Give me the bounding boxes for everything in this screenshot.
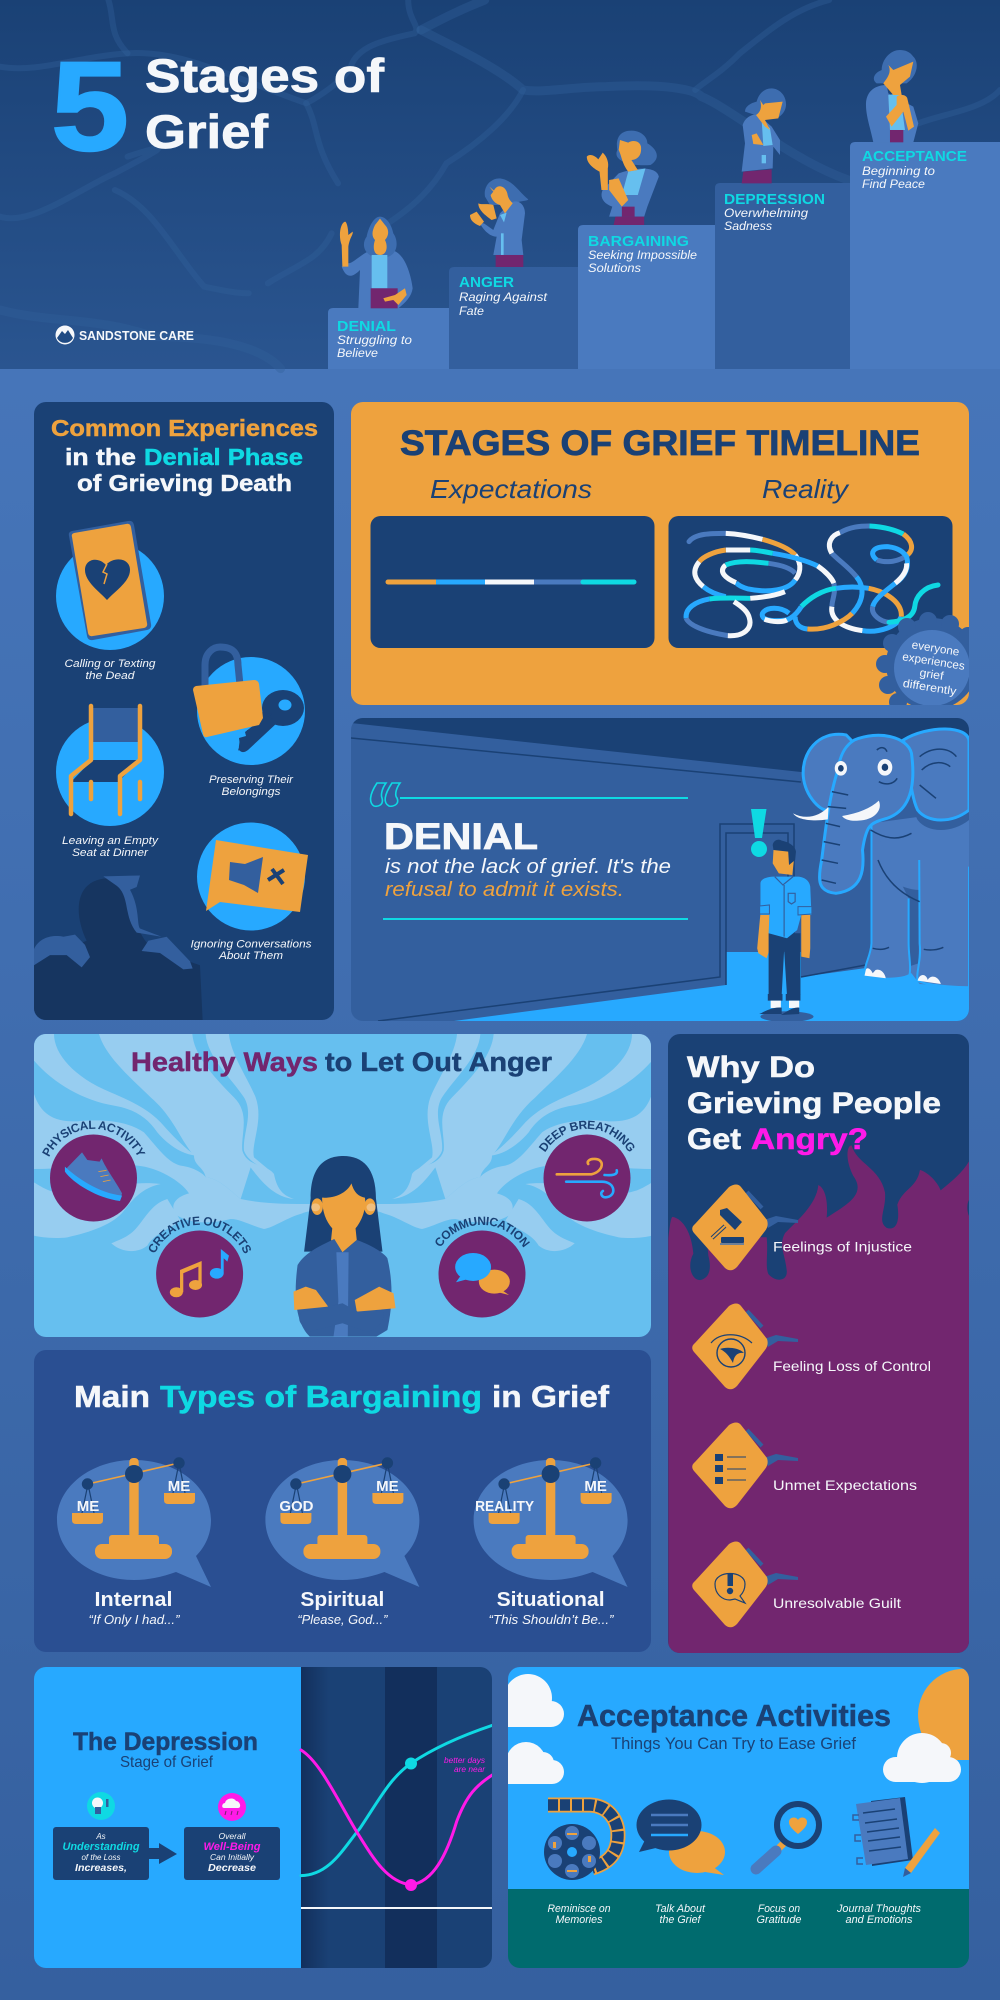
- step label: acceptance: [862, 148, 967, 191]
- illustration: man looking away: [757, 840, 814, 1022]
- step label: acceptance: Beginning to: [862, 166, 936, 178]
- left panel background: [34, 1667, 301, 1968]
- captions: the Grief: [660, 1914, 701, 1926]
- step label: depression: Sadness: [724, 221, 772, 233]
- panel background: [668, 1034, 969, 1653]
- step label: denial: DENIAL: [337, 318, 396, 335]
- flames: [668, 1145, 970, 1654]
- ceiling: [353, 718, 969, 772]
- steam swirls right: [374, 1034, 652, 1251]
- box: well-being decreases: Well-Being: [204, 1841, 261, 1853]
- room background: [351, 723, 916, 1021]
- sun: [918, 1669, 969, 1760]
- captions: and Emotions: [846, 1914, 913, 1926]
- panel: denial quote with elephant in the room: [351, 718, 969, 1022]
- quote body line one: is not the lack of grief. It's the: [385, 856, 671, 878]
- can: feeling loss of control: Feeling Loss of Control: [773, 1358, 931, 1374]
- captions: Reminisce on: [548, 1903, 610, 1915]
- badge: everyone experiences grief differently: differently: [902, 678, 957, 698]
- captions: Gratitude: [756, 1914, 802, 1926]
- crack texture: [0, 0, 1000, 369]
- panel: why do grieving people get angry: [668, 1034, 970, 1654]
- clouds: [504, 1674, 961, 1784]
- step label: denial: [337, 318, 413, 360]
- activity: creative outlets: [148, 1216, 251, 1318]
- step label: anger: [459, 274, 548, 318]
- step label: depression: [724, 191, 825, 233]
- quote heading: DENIAL: [384, 816, 538, 857]
- activity: physical activity: [42, 1120, 146, 1222]
- panel: common experiences in the denial phase: [34, 402, 334, 1020]
- icon: notebook and pencil: [853, 1797, 940, 1877]
- steam swirls left: [34, 1034, 312, 1251]
- caption: Seat at Dinner: [72, 847, 149, 859]
- icon: speech bubble with exclamation: [715, 1573, 745, 1603]
- title number 5: 5: [51, 35, 129, 177]
- caption: [209, 774, 294, 798]
- heading: [132, 1051, 552, 1077]
- exclamation mark: [751, 809, 767, 857]
- heading: [51, 415, 318, 496]
- captions: Talk About: [655, 1903, 706, 1915]
- scale: situational: [474, 1457, 628, 1587]
- title: Stages of: Stages of: [145, 49, 384, 102]
- heading: to Let Out Anger: [325, 1047, 553, 1077]
- activity: communication: [436, 1216, 530, 1318]
- heading: The Depression: [73, 1728, 258, 1756]
- activity: physical activity: PHYSICAL ACTIVITY: [42, 1120, 146, 1157]
- heading: Acceptance Activities: [577, 1698, 891, 1733]
- heading: in the: [65, 444, 136, 470]
- scale: internal: [57, 1457, 211, 1587]
- caption: Preserving Their: [209, 774, 294, 786]
- icon: gavel: [712, 1208, 744, 1245]
- step label: anger: Raging Against: [459, 292, 548, 304]
- heading: in Grief: [492, 1379, 610, 1414]
- scale caption: spiritual: [297, 1589, 388, 1627]
- quote marks: [371, 783, 400, 806]
- can: feelings of injustice: [692, 1184, 912, 1270]
- step label: denial: Struggling to: [337, 335, 413, 347]
- scale: spiritual: ME: [376, 1478, 399, 1495]
- step label: denial: Believe: [337, 348, 378, 360]
- heading: Stage of Grief: [120, 1754, 214, 1771]
- can: feeling loss of control: [692, 1304, 931, 1389]
- ground band: [508, 1889, 969, 1968]
- quote body line two: refusal to admit it exists.: [385, 879, 624, 901]
- panel: the depression stage of grief: [34, 1667, 493, 1968]
- heading: Angry?: [751, 1123, 868, 1156]
- step label: bargaining: BARGAINING: [588, 233, 689, 250]
- step label: anger: Fate: [459, 306, 484, 318]
- step label: acceptance: ACCEPTANCE: [862, 148, 967, 165]
- heading: Grieving People: [687, 1087, 941, 1120]
- can: unresolvable guilt: Unresolvable Guilt: [773, 1595, 901, 1611]
- icon: rain cloud: [218, 1793, 246, 1821]
- icon: speech bubbles: [636, 1800, 725, 1875]
- scale caption: internal: Internal: [94, 1589, 172, 1611]
- activity: deep breathing: DEEP BREATHING: [538, 1120, 634, 1152]
- label: expectations: Expectations: [430, 474, 592, 504]
- heading: Why Do: [687, 1051, 815, 1084]
- can: unmet expectations: [692, 1422, 917, 1508]
- scale caption: situational: “This Shouldn’t Be...”: [488, 1613, 614, 1627]
- badge: everyone experiences grief differently: [876, 612, 969, 705]
- label: reality: Reality: [762, 474, 850, 504]
- heading: Types of Bargaining: [160, 1379, 482, 1414]
- box: understanding increases: of the Loss: [82, 1853, 120, 1862]
- scale caption: internal: [88, 1589, 180, 1627]
- heading: Denial Phase: [144, 444, 303, 470]
- box: understanding increases: [53, 1827, 149, 1880]
- step label: bargaining: Seeking Impossible: [588, 250, 697, 262]
- scale: spiritual: [265, 1457, 419, 1587]
- figure: bargaining: [587, 131, 659, 225]
- reality chart: tangled line: [668, 516, 952, 648]
- scale: situational: REALITY: [475, 1498, 534, 1515]
- step label: depression: DEPRESSION: [724, 191, 825, 208]
- silhouette of person covering ears: [34, 876, 203, 1020]
- box: understanding increases: As: [95, 1832, 106, 1841]
- panel background: [34, 1034, 651, 1337]
- icon: empty chair: [56, 706, 164, 826]
- caption: About Them: [218, 950, 283, 962]
- scale caption: spiritual: “Please, God...”: [297, 1613, 388, 1627]
- figure: depression: [742, 88, 786, 183]
- icon: lock and key: [193, 647, 305, 765]
- scale caption: situational: [488, 1589, 614, 1627]
- expectation chart: straight line: [370, 516, 654, 648]
- panel: main types of bargaining: [34, 1350, 651, 1652]
- sky: [508, 1667, 969, 1889]
- hero background: [0, 0, 1000, 369]
- heading: Main: [74, 1379, 150, 1414]
- stair steps: [328, 142, 1000, 369]
- icon: light bulb: [87, 1792, 115, 1820]
- step label: bargaining: [588, 233, 697, 275]
- box: well-being decreases: Decrease: [208, 1862, 256, 1874]
- title: Grief: Grief: [145, 105, 268, 158]
- heading: Get: [687, 1123, 741, 1156]
- box: well-being decreases: Overall: [218, 1832, 246, 1841]
- badge: everyone experiences grief differently: everyone: [911, 639, 960, 659]
- divider top: [400, 797, 688, 799]
- box: well-being decreases: [184, 1827, 280, 1880]
- step label: anger: ANGER: [459, 274, 514, 291]
- logo: SANDSTONE CARE: [79, 328, 194, 343]
- icon: checklist: [715, 1454, 746, 1484]
- caption: Belongings: [222, 786, 281, 798]
- caption: [62, 835, 160, 859]
- door and wall lines: [351, 738, 920, 1021]
- captions: Journal Thoughts: [836, 1903, 921, 1915]
- heading: [687, 1051, 941, 1156]
- panel: healthy ways to let out anger: [34, 1034, 651, 1337]
- icon: steering wheel: [711, 1335, 752, 1367]
- scale: situational: ME: [584, 1478, 607, 1495]
- caption: Ignoring Conversations: [190, 938, 312, 950]
- subheading: Things You Can Try to Ease Grief: [611, 1734, 856, 1753]
- panel: stages of grief timeline: [351, 402, 978, 711]
- figure: acceptance: [866, 50, 918, 142]
- icon: phone with broken heart: [56, 521, 164, 650]
- heading: Common Experiences: [51, 415, 318, 441]
- box: well-being decreases: Can Initially: [210, 1853, 255, 1862]
- badge: everyone experiences grief differently: grief: [919, 667, 945, 683]
- caption: Calling or Texting: [64, 658, 156, 670]
- scale caption: spiritual: Spiritual: [300, 1589, 384, 1611]
- scale caption: situational: Situational: [497, 1589, 605, 1611]
- box: understanding increases: Understanding: [62, 1841, 140, 1853]
- panel: acceptance activities: [504, 1667, 969, 1968]
- figure: denial: [340, 217, 413, 308]
- scale: internal: ME: [168, 1478, 190, 1495]
- captions: [548, 1903, 921, 1926]
- captions: Memories: [556, 1914, 603, 1926]
- heading: [74, 1379, 610, 1414]
- activity: creative outlets: CREATIVE OUTLETS: [148, 1216, 251, 1254]
- can: unmet expectations: Unmet Expectations: [773, 1477, 917, 1493]
- caption: [64, 658, 156, 682]
- caption: the Dead: [86, 670, 135, 682]
- heading: of Grieving Death: [77, 470, 292, 496]
- box: understanding increases: Increases,: [75, 1862, 127, 1874]
- illustration: woman with arms crossed: [293, 1156, 396, 1337]
- figure: anger: [470, 178, 528, 267]
- scale: internal: ME: [77, 1498, 99, 1515]
- logo: [56, 326, 194, 344]
- hero header: [0, 0, 1000, 369]
- step label: bargaining: Solutions: [588, 263, 641, 275]
- panel background: [34, 1350, 651, 1652]
- can: feelings of injustice: Feelings of Injustice: [773, 1238, 912, 1254]
- heading: Healthy Ways: [131, 1047, 318, 1077]
- panel background: [351, 402, 969, 705]
- chart: understanding versus well-being: [301, 1667, 493, 1968]
- badge: everyone experiences grief differently: experiences: [901, 651, 966, 673]
- scale caption: internal: “If Only I had...”: [88, 1613, 180, 1627]
- heading: STAGES OF GRIEF TIMELINE: [400, 424, 920, 463]
- icon: muted conversation: [197, 822, 308, 930]
- can: unresolvable guilt: [692, 1542, 901, 1627]
- panel background: [34, 402, 334, 1020]
- illustration: elephant: [793, 729, 969, 987]
- heading: [73, 1728, 258, 1771]
- scale: spiritual: GOD: [279, 1498, 314, 1515]
- step label: depression: Overwhelming: [724, 208, 809, 220]
- divider bottom: [383, 918, 688, 920]
- activity: communication: COMMUNICATION: [436, 1216, 530, 1248]
- icon: film reel: [544, 1805, 618, 1880]
- activity: deep breathing: [538, 1120, 634, 1222]
- caption: [190, 938, 312, 962]
- caption: Leaving an Empty: [62, 835, 160, 847]
- icon: magnifying glass with heart: [756, 1804, 819, 1869]
- arrow: [149, 1843, 177, 1864]
- chart: understanding versus well-being: are near: [454, 1765, 485, 1774]
- chart: understanding versus well-being: better days: [444, 1756, 485, 1765]
- captions: Focus on: [758, 1903, 800, 1915]
- floor: [454, 952, 969, 1021]
- step label: acceptance: Find Peace: [862, 179, 925, 191]
